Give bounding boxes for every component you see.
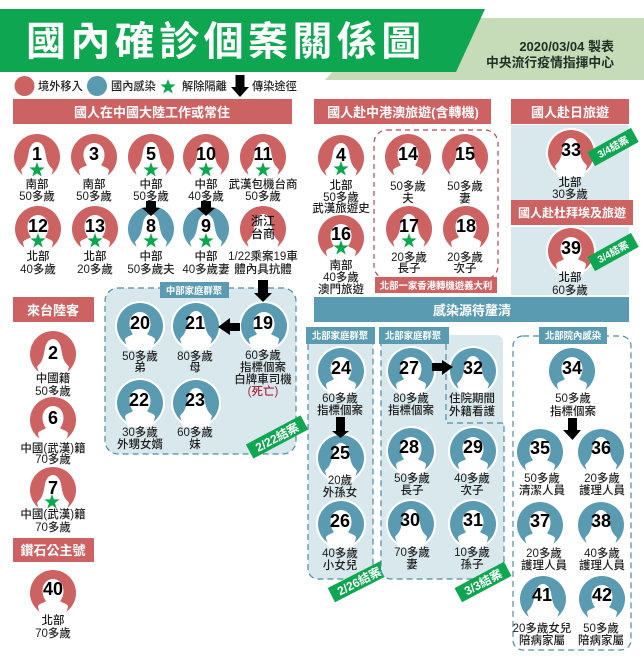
case 17 <box>384 204 434 275</box>
case 31: 孫子 <box>460 558 484 571</box>
case 28: 50多歲 <box>394 471 430 485</box>
panel: Japan travel case <box>511 125 629 201</box>
case 41: 41 <box>532 585 552 605</box>
case 9: 40多歲妻 <box>182 262 230 276</box>
case 17: 17 <box>399 216 419 236</box>
case 27: 指標個案 <box>388 403 434 417</box>
panel: northern family cluster A <box>306 327 375 579</box>
case 42: 42 <box>592 585 612 605</box>
case 5: 50多歲 <box>133 189 169 203</box>
case 25: 20歲 <box>328 473 352 487</box>
case 15: 50多歲 <box>447 179 483 193</box>
legend: 境外移入 <box>38 79 83 93</box>
heading: Diamond Princess <box>13 538 94 562</box>
case 15: 妻 <box>459 191 471 205</box>
case 13 <box>70 204 120 276</box>
case 16: 澳門旅遊 <box>318 282 364 296</box>
Zhejiang businessman <box>228 204 298 276</box>
case 12 <box>13 204 63 276</box>
case 42: 50多歲 <box>583 621 619 635</box>
case 16 <box>316 213 366 296</box>
case 38: 40多歲 <box>584 546 620 560</box>
case 34 <box>547 346 597 418</box>
case 34: 34 <box>562 358 582 378</box>
case 6: 70多歲 <box>35 452 71 466</box>
case 36: 20多歲 <box>584 471 620 485</box>
case 39: 北部 <box>558 270 582 284</box>
case 18: 18 <box>456 216 476 236</box>
case 13: 20多歲 <box>77 262 113 276</box>
case 42 <box>577 574 627 647</box>
case 34: 指標個案 <box>550 404 596 418</box>
case 23: 妹 <box>189 438 201 451</box>
case 21: 21 <box>185 313 205 333</box>
case 32: 外籍看護 <box>449 404 495 418</box>
heading: travel to Japan: 國人赴日旅遊 <box>531 105 609 120</box>
case 20: 50多歲 <box>122 349 158 363</box>
case 37 <box>515 500 567 572</box>
case 31: 31 <box>463 510 483 530</box>
cluster tag <box>306 327 375 344</box>
closed badge: 3/4 Dubai case <box>587 233 639 271</box>
case 17: 長子 <box>398 262 420 275</box>
case 30: 30 <box>400 510 420 530</box>
cluster tag: 北部院內感染 <box>545 330 602 341</box>
case 12: 40多歲 <box>20 262 56 276</box>
case 6: 中國(武漢)籍 <box>20 441 86 455</box>
case 6 <box>20 395 86 466</box>
case 31 <box>448 499 498 571</box>
case 15 <box>440 132 490 205</box>
case 23: 23 <box>185 390 205 410</box>
family tag <box>375 277 497 293</box>
arrow: Zhejiang businessman to case 19 <box>254 280 272 302</box>
case 38 <box>576 500 626 572</box>
case 41: 20多歲女兒 <box>513 621 572 635</box>
case 7 <box>20 465 86 534</box>
case 27: 80多歲 <box>393 391 429 405</box>
closed badge: 2/26 <box>328 560 390 602</box>
cluster tag <box>379 327 449 344</box>
date and source <box>486 39 614 70</box>
case 39 <box>546 226 596 297</box>
case 19: 19 <box>253 313 273 333</box>
case 11: 50多歲 <box>245 189 281 203</box>
case 36: 護理人員 <box>579 483 625 497</box>
case 29: 次子 <box>460 483 484 497</box>
heading: Diamond Princess: 鑽石公主號 <box>20 543 86 558</box>
closed badge: 3/3: 3/3結案 <box>462 566 504 598</box>
heading: source under investigation <box>314 297 629 322</box>
case 3: 3 <box>89 144 99 164</box>
heading: mainland visitors: 來台陸客 <box>27 303 79 318</box>
arrow: case 10 to case 9 <box>197 201 215 216</box>
case 23 <box>171 378 221 451</box>
legend: 解除隔離 <box>182 79 227 93</box>
case 1: 50多歲 <box>19 189 55 203</box>
family tag: 北部一家香港轉機遊義大利 <box>380 280 492 291</box>
case 29: 29 <box>463 437 483 457</box>
case 25: 25 <box>330 443 350 463</box>
panel: northern family cluster B <box>379 327 504 579</box>
case 35: 35 <box>530 438 550 458</box>
case 31: 10多歲 <box>454 545 490 559</box>
case 32 <box>448 346 498 418</box>
case 32: 住院期間 <box>449 391 495 405</box>
case 41 <box>513 574 572 647</box>
case 35: 50多歲 <box>524 471 560 485</box>
closed badge: 3/3 <box>455 562 511 602</box>
case 10: 10 <box>196 144 216 164</box>
case 23: 60多歲 <box>177 425 213 439</box>
case 21: 母 <box>189 362 201 374</box>
case 8 <box>126 204 176 276</box>
case 35: 清潔人員 <box>519 483 565 497</box>
case 21: 80多歲 <box>177 349 213 363</box>
case 40: 40 <box>43 579 63 599</box>
case 30 <box>386 499 436 571</box>
case 10: 中部 <box>194 177 218 191</box>
case 21 <box>171 301 221 374</box>
case 22 <box>115 378 165 451</box>
arrow: case 34 to cases 35 and 36 <box>563 418 581 440</box>
case 39: 60多歲 <box>552 283 588 297</box>
case 3 <box>69 132 119 203</box>
case 26 <box>316 499 366 572</box>
case 16: 南部 <box>330 258 352 272</box>
panel: northern family via Hong Kong to Italy <box>374 130 498 293</box>
case 19: (死亡) <box>248 384 278 398</box>
case 29 <box>448 426 498 497</box>
case 34: 50多歲 <box>555 391 591 405</box>
Zhejiang businessman: 1/22乘案19車 <box>228 249 298 263</box>
case 20: 20 <box>130 313 150 333</box>
case 18 <box>441 204 491 275</box>
case 38: 護理人員 <box>579 558 625 572</box>
case 4: 北部 <box>330 178 352 192</box>
Zhejiang businessman: 台商 <box>251 226 275 241</box>
case 8: 8 <box>146 216 156 236</box>
case 22: 外甥女婿 <box>117 437 163 451</box>
case 16: 40多歲 <box>323 270 359 284</box>
case 12: 12 <box>28 216 48 236</box>
case 10 <box>181 132 231 203</box>
case 33 <box>546 128 596 201</box>
case 7: 7 <box>48 478 58 498</box>
legend <box>14 75 297 97</box>
case 36 <box>576 427 626 497</box>
case 15: 15 <box>455 144 475 164</box>
case 37: 20多歲 <box>526 546 562 560</box>
heading: travel to Japan <box>511 99 629 124</box>
heading: mainland visitors <box>13 297 94 322</box>
cluster tag: 北部家庭群聚 <box>385 330 441 341</box>
case 9: 中部 <box>194 249 218 263</box>
case 30: 70多歲 <box>394 545 430 559</box>
case 25 <box>316 433 366 499</box>
closed badge: 3/4 Japan case <box>587 128 639 166</box>
heading: travel to Dubai and Egypt: 國人赴杜拜埃及旅遊 <box>518 205 626 220</box>
case 28: 28 <box>399 437 419 457</box>
Zhejiang businessman: 浙江 <box>251 214 275 228</box>
case 29: 40多歲 <box>454 471 490 485</box>
case 28: 長子 <box>400 484 424 497</box>
case 4: 武漢旅遊史 <box>312 201 370 215</box>
case 19: 60多歲 <box>245 348 281 362</box>
case 7: 70多歲 <box>35 520 71 534</box>
case 1: 1 <box>32 144 42 164</box>
case 1: 南部 <box>26 177 48 191</box>
case 13: 北部 <box>84 249 106 263</box>
cluster tag <box>160 282 229 298</box>
heading: working or living in China <box>13 99 292 124</box>
arrow: case 24 to case 25 <box>332 417 349 438</box>
case 39: 39 <box>561 238 581 258</box>
cluster tag: 北部家庭群聚 <box>312 330 368 341</box>
case 33: 30多歲 <box>552 187 588 201</box>
cluster tag <box>539 327 607 344</box>
case 14: 夫 <box>402 191 414 205</box>
case 8: 50多歲夫 <box>127 262 175 276</box>
case 19 <box>234 301 292 398</box>
case 40: 北部 <box>42 613 64 627</box>
case 33: 33 <box>561 140 581 160</box>
case 18: 20多歲 <box>447 250 483 264</box>
case 24: 60多歲 <box>322 391 358 405</box>
closed badge: 2/22 <box>246 415 308 459</box>
case 17: 20多歲 <box>391 250 427 264</box>
arrow: case 27 to case 32 <box>432 360 453 375</box>
case 13: 13 <box>85 216 105 236</box>
legend: 國內感染 <box>111 79 156 93</box>
case 14: 50多歲 <box>390 179 426 193</box>
case 27: 27 <box>399 358 419 378</box>
closed badge: 2/22: 2/22結案 <box>253 419 301 455</box>
case 12: 北部 <box>26 249 50 263</box>
Zhejiang businessman: 體內具抗體 <box>234 262 292 276</box>
panel: Dubai Egypt travel case <box>511 226 629 297</box>
case 26: 小女兒 <box>323 558 358 572</box>
case 16: 16 <box>331 224 351 244</box>
header band <box>0 9 644 80</box>
case 6: 6 <box>48 408 58 428</box>
case 22: 22 <box>129 390 149 410</box>
case 7: 中國(武漢)籍 <box>20 507 86 521</box>
case 24 <box>316 346 366 417</box>
case 40 <box>28 568 78 640</box>
panel: central family cluster <box>105 282 296 454</box>
case 41: 陪病家屬 <box>519 633 565 647</box>
case 36: 36 <box>591 438 611 458</box>
panel: northern hospital infection <box>513 327 631 650</box>
case 14: 14 <box>398 144 418 164</box>
case 5: 中部 <box>140 177 162 191</box>
case 10: 40多歲 <box>188 189 224 203</box>
case 19: 指標個案 <box>240 360 286 374</box>
case 11 <box>228 132 298 203</box>
case 5 <box>126 132 176 203</box>
case 26: 26 <box>330 511 350 531</box>
legend: 傳染途徑 <box>252 79 297 93</box>
case 14 <box>383 132 433 205</box>
case 37: 護理人員 <box>521 558 567 572</box>
cluster tag: 中部家庭群聚 <box>166 285 222 296</box>
case 19: 白牌車司機 <box>234 372 292 386</box>
closed badge: 2/26: 2/26結案 <box>334 564 384 598</box>
heading: working or living in China: 國人在中國大陸工作或常住 <box>74 105 230 120</box>
case 2: 2 <box>48 343 58 363</box>
case 4: 4 <box>336 145 346 165</box>
case 2 <box>28 329 78 398</box>
case 30: 妻 <box>406 557 418 571</box>
case 32: 32 <box>463 358 483 378</box>
case 27 <box>386 346 436 417</box>
heading: travel to Dubai and Egypt <box>511 200 633 225</box>
case 3: 南部 <box>82 177 106 191</box>
case 33: 北部 <box>558 175 582 189</box>
closed badge: 3/4 Japan case: 3/4結案 <box>595 133 631 161</box>
case 38: 38 <box>591 511 611 531</box>
case 9: 9 <box>201 216 211 236</box>
case 37: 37 <box>530 511 550 531</box>
closed badge: 3/4 Dubai case: 3/4結案 <box>595 238 631 266</box>
case 3: 50多歲 <box>76 189 112 203</box>
case 26: 40多歲 <box>322 546 358 560</box>
arrow: case 5 to case 8 <box>142 201 160 216</box>
case 28 <box>386 426 436 497</box>
case 11: 武漢包機台商 <box>228 177 298 191</box>
case 22: 30多歲 <box>122 425 158 439</box>
heading: source under investigation: 感染源待釐清 <box>433 303 511 318</box>
date and source: 中央流行疫情指揮中心 <box>486 55 614 70</box>
heading: travel to China, HK, Macau <box>314 99 491 124</box>
case 20 <box>115 301 165 374</box>
heading: travel to China, HK, Macau: 國人赴中港澳旅遊(含轉機) <box>327 105 479 120</box>
case 35 <box>515 427 565 497</box>
case 4: 50多歲 <box>323 190 359 204</box>
title: 國內確診個案關係圖 <box>26 20 426 64</box>
case 5: 5 <box>146 144 156 164</box>
case 20: 弟 <box>134 360 146 374</box>
case 2: 中國籍 <box>36 371 71 385</box>
case 8: 中部 <box>140 249 162 263</box>
case 18: 次子 <box>454 261 476 275</box>
case 24: 指標個案 <box>317 403 363 417</box>
case 40: 70多歲 <box>35 626 71 640</box>
case 11: 11 <box>253 144 273 164</box>
arrow: case 19 to case 21 <box>218 318 240 335</box>
case 42: 陪病家屬 <box>578 633 624 647</box>
date and source: 2020/03/04 製表 <box>519 39 614 54</box>
case 1 <box>12 132 62 203</box>
case 9 <box>181 204 231 276</box>
case 2: 50多歲 <box>35 384 71 398</box>
case 25: 外孫女 <box>323 485 357 499</box>
case 4 <box>312 133 370 215</box>
case 24: 24 <box>331 358 351 378</box>
